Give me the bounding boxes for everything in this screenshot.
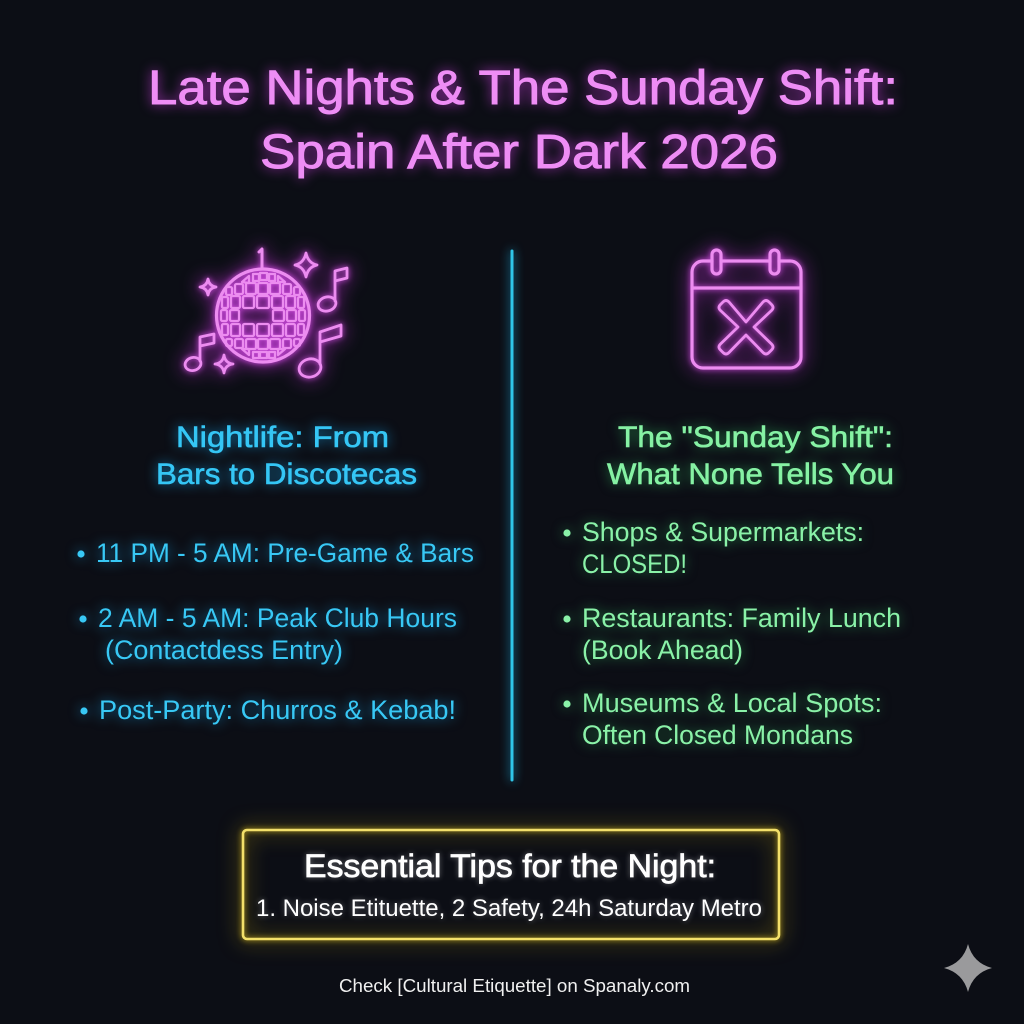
list: nightlife schedule [77,538,474,725]
tips heading: Essential Tips for the Night: [304,848,716,884]
tips list: 1. Noise Etituette, 2 Safety, 24h Saturday Metro [256,895,762,922]
icon: sparkle watermark [944,944,992,992]
title [148,62,898,179]
heading: nightlife: Bars to Discotecas [156,458,417,491]
list: sunday closures: CLOSED! [582,549,687,579]
list: sunday closures: Restaurants: Family Lunch [582,603,901,633]
list: sunday closures: Shops & Supermarkets: [582,517,864,547]
list: nightlife schedule: Post-Party: Churros & Kebab! [99,695,456,725]
heading: nightlife: Nightlife: From [176,421,389,454]
icon: calendar with X [692,250,801,368]
title: Late Nights & The Sunday Shift: [148,62,898,115]
list: nightlife schedule: 11 PM - 5 AM: Pre-Game & Bars [96,538,474,568]
list: nightlife schedule: (Contactdess Entry) [105,635,343,665]
list: sunday closures: Museums & Local Spots: [582,688,882,718]
list: sunday closures: (Book Ahead) [582,635,743,665]
icon: disco ball with notes and sparkles [184,249,347,380]
list: sunday closures: Often Closed Mondans [582,720,853,750]
footer: Check [Cultural Etiquette] on Spanaly.com [339,976,690,996]
heading: sunday shift: The "Sunday Shift": [618,421,893,454]
heading: nightlife [156,421,417,491]
list: sunday closures [563,517,901,750]
heading: sunday shift [607,421,894,491]
divider [510,251,514,780]
title: Spain After Dark 2026 [260,126,778,179]
panel: essential tips [243,830,779,939]
box outline [243,830,779,939]
list: nightlife schedule: 2 AM - 5 AM: Peak Club Hours [98,603,457,633]
heading: sunday shift: What None Tells You [607,458,894,491]
